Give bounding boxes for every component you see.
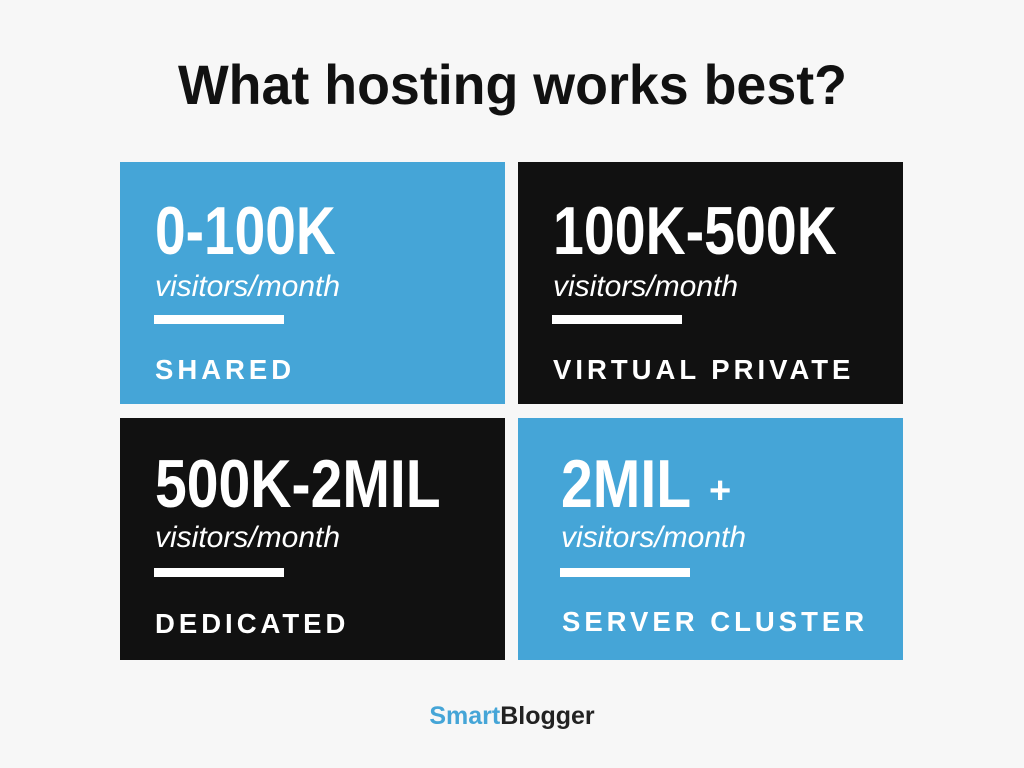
- range: 2MIL: 2MIL: [561, 446, 691, 522]
- range: 0-100K: 0-100K: [155, 193, 336, 269]
- divider bar: [552, 315, 682, 324]
- label: server cluster: SERVER CLUSTER: [562, 606, 868, 637]
- label: shared: SHARED: [155, 354, 295, 385]
- panel: server cluster: [518, 418, 903, 660]
- title: What hosting works best?: [177, 53, 847, 116]
- label: virtual private: VIRTUAL PRIVATE: [553, 354, 854, 385]
- subtitle: visitors/month: [155, 270, 340, 303]
- panel: shared: [120, 162, 505, 404]
- divider bar: [154, 568, 284, 577]
- divider bar: [560, 568, 690, 577]
- label: dedicated: DEDICATED: [155, 608, 349, 639]
- range: 500K-2MIL: 500K-2MIL: [155, 446, 441, 522]
- subtitle: visitors/month: [155, 521, 340, 554]
- panel: virtual private: [518, 162, 903, 404]
- plus sign: +: [709, 470, 731, 512]
- divider bar: [154, 315, 284, 324]
- range: 100K-500K: 100K-500K: [553, 193, 837, 269]
- panel: dedicated: [120, 418, 505, 660]
- subtitle: visitors/month: [553, 270, 738, 303]
- logo: SmartBlogger: SmartBlogger: [429, 702, 595, 730]
- subtitle: visitors/month: [561, 521, 746, 554]
